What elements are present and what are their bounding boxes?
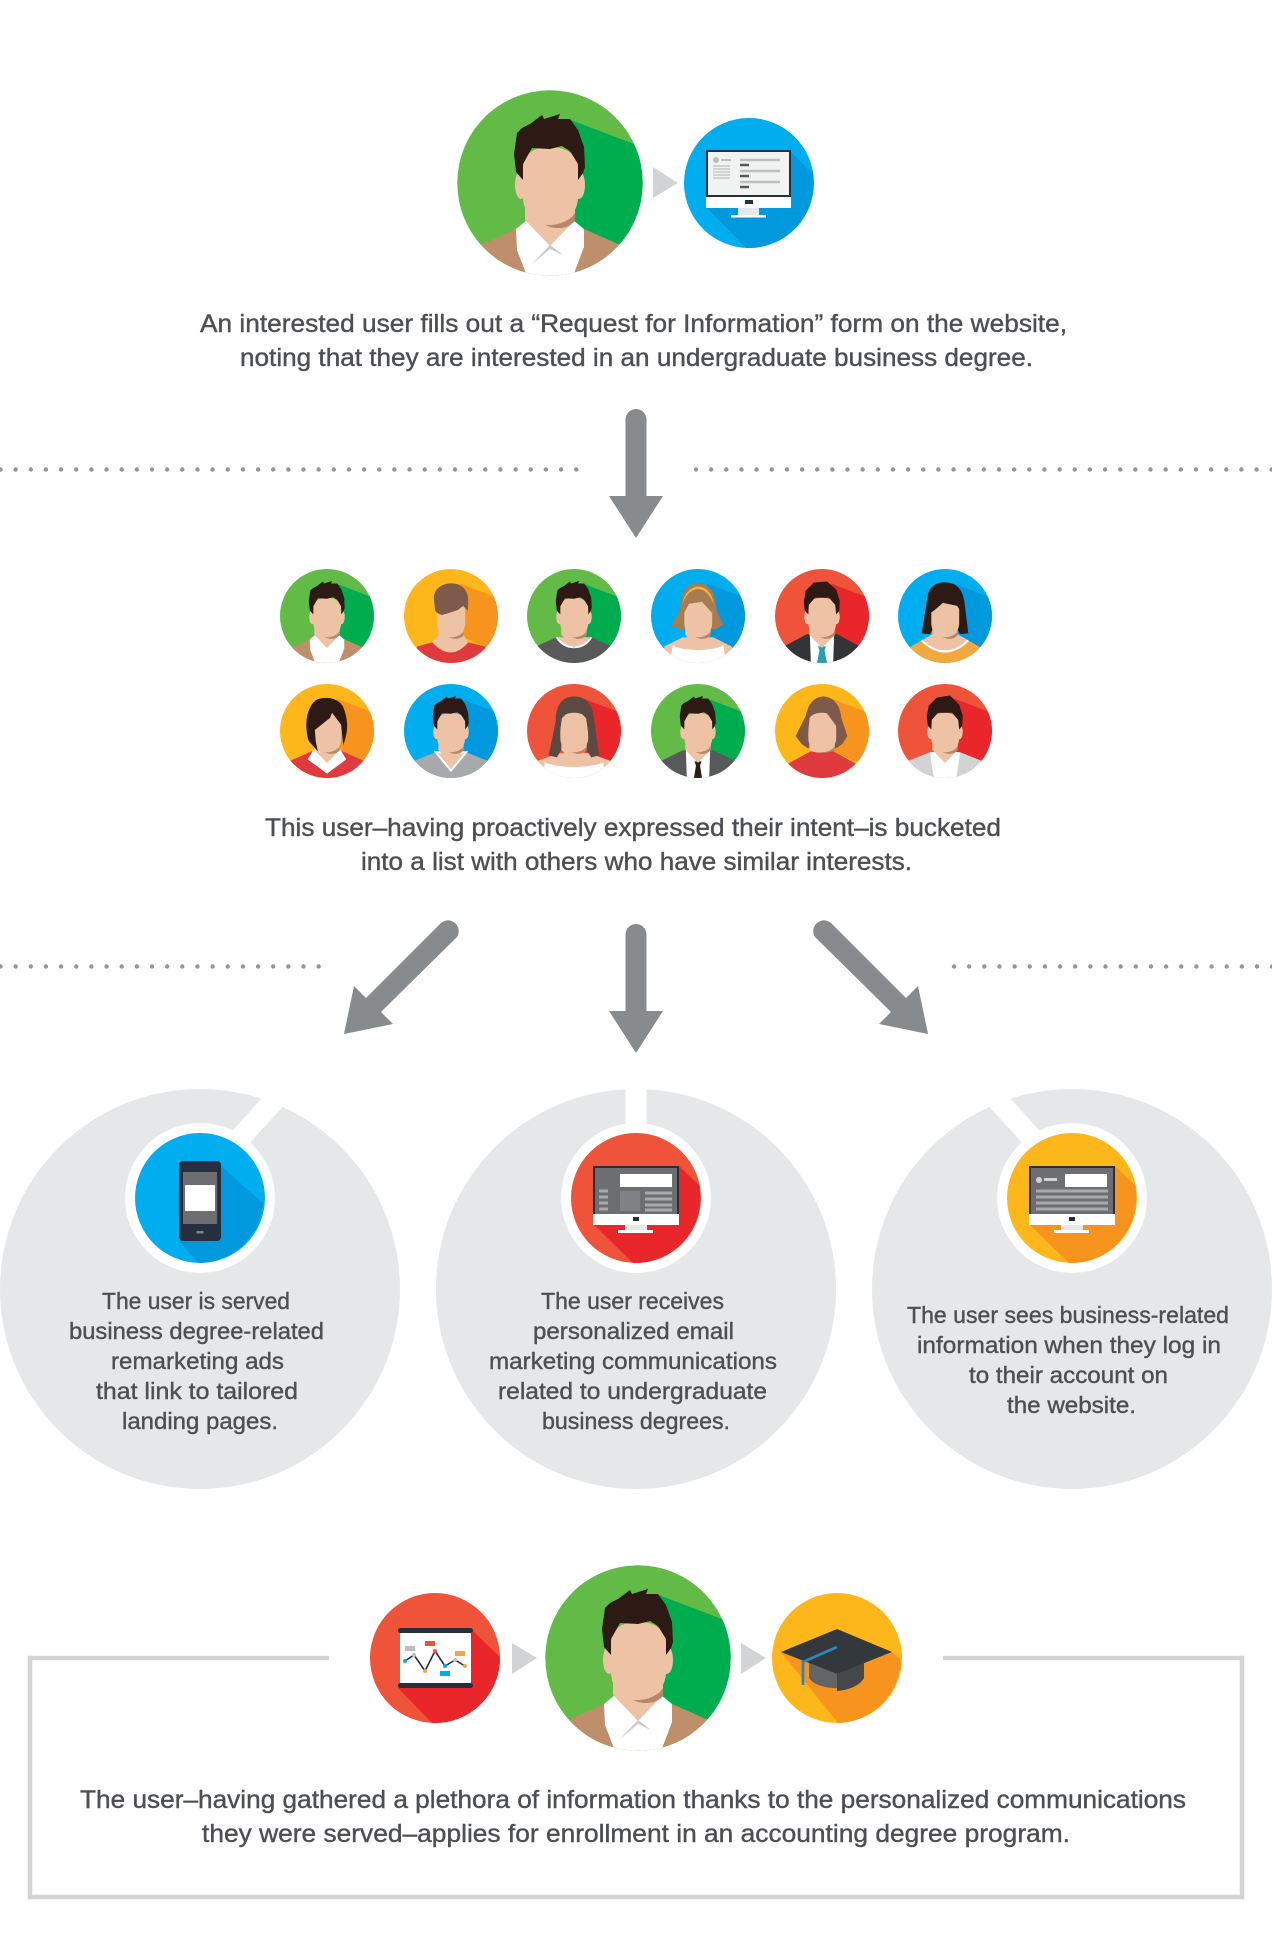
text: information when they log in (917, 1332, 1221, 1358)
icon: analytics board (370, 1593, 500, 1723)
intro text: noting that they are interested in an undergraduate business degree. (240, 344, 1033, 372)
intro text: An interested user fills out a “Request for Information” form on the website, (200, 310, 1067, 338)
arrow: center (609, 924, 663, 1053)
icon: monitor with form (684, 118, 814, 248)
outcome frame (30, 1658, 1242, 1897)
text: business degree-related (69, 1318, 324, 1344)
text: The user sees business-related (907, 1302, 1229, 1328)
text (69, 1288, 324, 1434)
arrow: user to form (653, 167, 678, 198)
avatar: woman long hair, white tank (527, 684, 625, 782)
avatar grid (279, 569, 996, 782)
icon: phone (135, 1133, 265, 1263)
text (489, 1288, 777, 1434)
outcome text: The user–having gathered a plethora of information thanks to the personalized communications (80, 1786, 1186, 1814)
arrow: analytics to user (512, 1643, 537, 1674)
list text: into a list with others who have similar interests. (361, 848, 912, 876)
arrow: down to list (609, 409, 663, 538)
text: marketing communications (489, 1348, 777, 1374)
avatar: man tan jacket (280, 569, 378, 667)
panel: remarketing ads (0, 1089, 400, 1489)
avatar: man dark tee (526, 569, 625, 667)
avatar: man black suit, teal tie (774, 569, 873, 667)
arrow: user to graduation (741, 1643, 766, 1674)
panel: website account (872, 1089, 1272, 1489)
text: remarketing ads (111, 1348, 284, 1374)
text: related to undergraduate (498, 1378, 767, 1404)
text: The user receives (541, 1288, 724, 1314)
avatar: woman dark bob, orange top (897, 569, 996, 667)
list text: This user–having proactively expressed their intent–is bucketed (265, 814, 1001, 842)
text: The user is served (102, 1288, 290, 1314)
arrow: right (813, 920, 928, 1034)
bottom user avatar (545, 1565, 738, 1758)
avatar: man dark suit, black tie (650, 684, 749, 782)
icon: monitor yellow (1007, 1133, 1137, 1263)
list text (265, 814, 1001, 876)
text: personalized email (533, 1318, 734, 1344)
avatar: woman headband (651, 569, 749, 667)
avatar: brown fringe, red shirt (403, 569, 502, 667)
top user avatar (457, 90, 650, 283)
avatar: man grey jacket, white tee (897, 684, 996, 782)
text: business degrees. (542, 1408, 730, 1434)
text (907, 1302, 1229, 1418)
intro text (200, 310, 1067, 372)
avatar: woman brown tousled, red turtleneck (774, 684, 873, 782)
avatar: woman short dark hair, red collar (279, 684, 378, 782)
text: that link to tailored (96, 1378, 298, 1404)
panel: email marketing (436, 1080, 836, 1489)
arrow: left (344, 920, 459, 1034)
icon: graduation cap (772, 1593, 902, 1723)
text: landing pages. (122, 1408, 278, 1434)
outcome text (80, 1786, 1186, 1848)
icon: monitor red (571, 1133, 701, 1263)
outcome text: they were served–applies for enrollment in an accounting degree program. (202, 1820, 1070, 1848)
text: to their account on (969, 1362, 1168, 1388)
text: the website. (1007, 1392, 1136, 1418)
avatar: man grey v-neck (403, 684, 502, 782)
